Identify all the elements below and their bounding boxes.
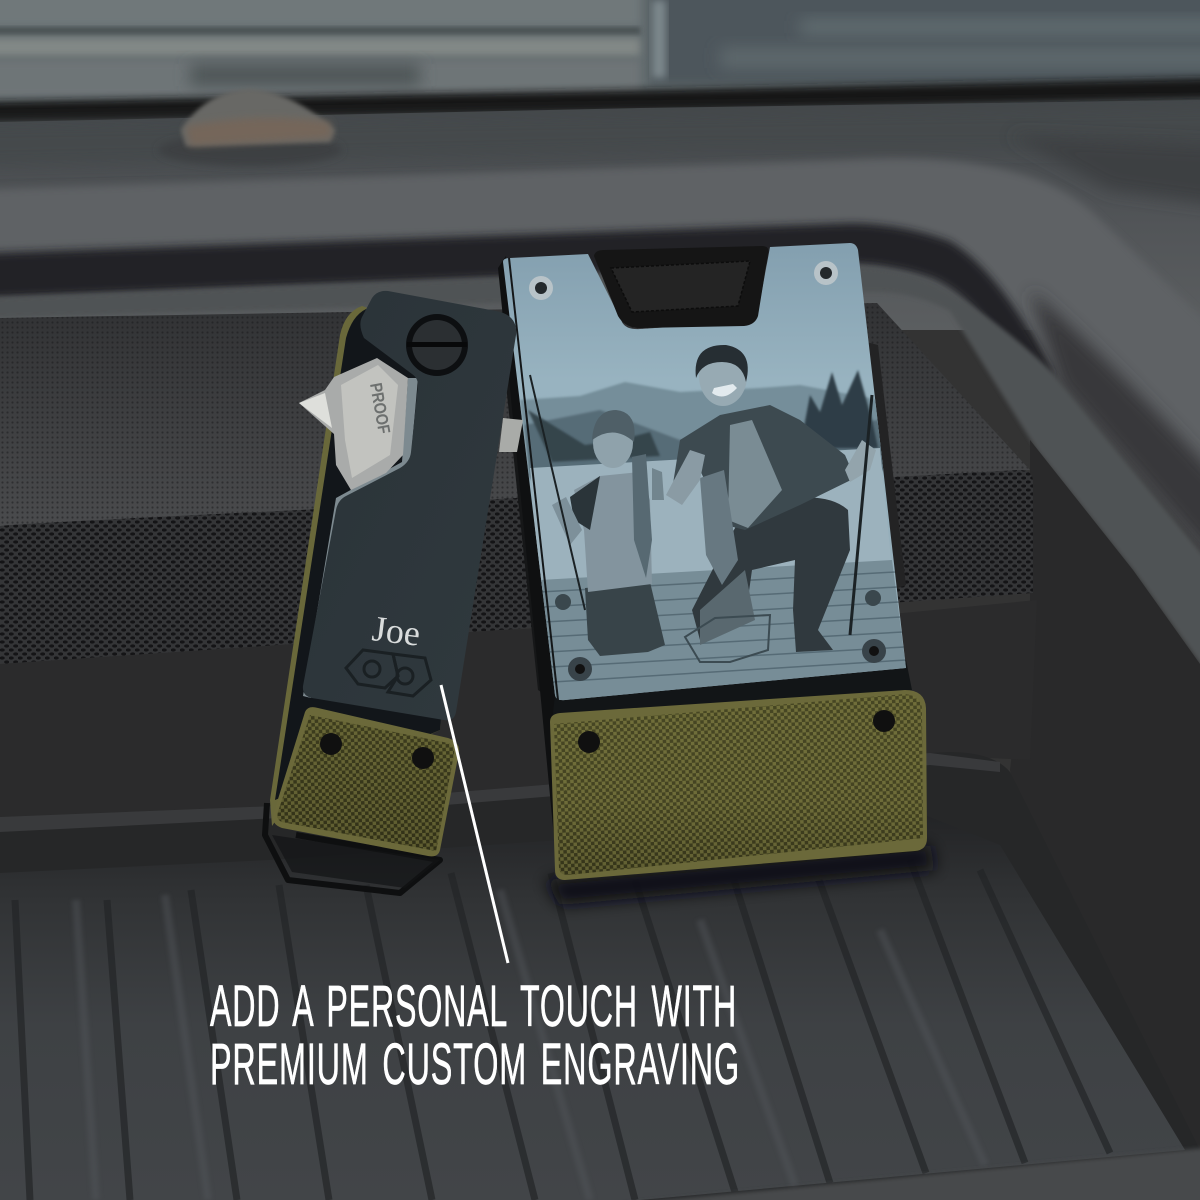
engraved metal plate xyxy=(503,243,906,703)
engraved dock xyxy=(540,560,906,703)
engraved boy xyxy=(552,410,665,656)
engraved man xyxy=(666,345,876,652)
dark windshield base line xyxy=(0,78,1200,126)
wallet elastic bands xyxy=(505,342,906,700)
key blade tip on right xyxy=(499,418,523,452)
tool olive strap xyxy=(273,707,459,856)
tool back with olive edge xyxy=(270,306,460,826)
engraved mountains xyxy=(520,382,885,480)
blurred windshield background xyxy=(0,0,1200,130)
steel side bevel xyxy=(303,378,418,698)
tray ribs xyxy=(15,860,1110,1200)
textured vent panel xyxy=(0,303,1033,664)
dark shadow under cowl xyxy=(0,224,1052,420)
leather pull tab xyxy=(594,246,768,328)
callout text xyxy=(210,974,740,1097)
light cowl edge xyxy=(0,159,1200,570)
tool main body xyxy=(303,291,516,720)
wallet body shadow xyxy=(498,256,560,880)
engraved lake xyxy=(530,448,892,590)
engraved trees xyxy=(800,370,878,448)
callout line one: ADD A PERSONAL TOUCH WITH xyxy=(210,974,737,1039)
cowl shadow on the curve xyxy=(1030,290,1200,570)
wallet olive strap xyxy=(550,690,927,880)
lower dash under vent xyxy=(0,600,1037,817)
callout pointer line xyxy=(441,685,508,963)
wallet screws xyxy=(529,261,886,681)
tray xyxy=(0,752,1200,1200)
tray foreground blurred lip xyxy=(620,1148,1200,1200)
key tool xyxy=(265,291,523,893)
engraved name: Joe xyxy=(370,608,423,654)
carabiner loop xyxy=(265,803,440,893)
vent top face xyxy=(0,303,1030,526)
vent front face xyxy=(0,470,1033,664)
dashboard top xyxy=(0,100,1200,330)
brass key xyxy=(299,358,408,490)
embossed hexagon logo xyxy=(346,650,431,696)
screw head xyxy=(406,314,468,376)
strap contact shadow xyxy=(545,845,935,905)
right side console wall xyxy=(1010,440,1200,1200)
engraved reel and logo xyxy=(555,590,881,662)
wallet xyxy=(498,243,935,905)
tray rib highlights xyxy=(76,890,985,1200)
callout line two: PREMIUM CUSTOM ENGRAVING xyxy=(210,1032,740,1097)
lighter trim strip xyxy=(0,266,1200,670)
engraved fishing rods xyxy=(530,375,872,635)
brass key: PROOF xyxy=(366,382,393,436)
blurred dash knob xyxy=(158,89,342,166)
